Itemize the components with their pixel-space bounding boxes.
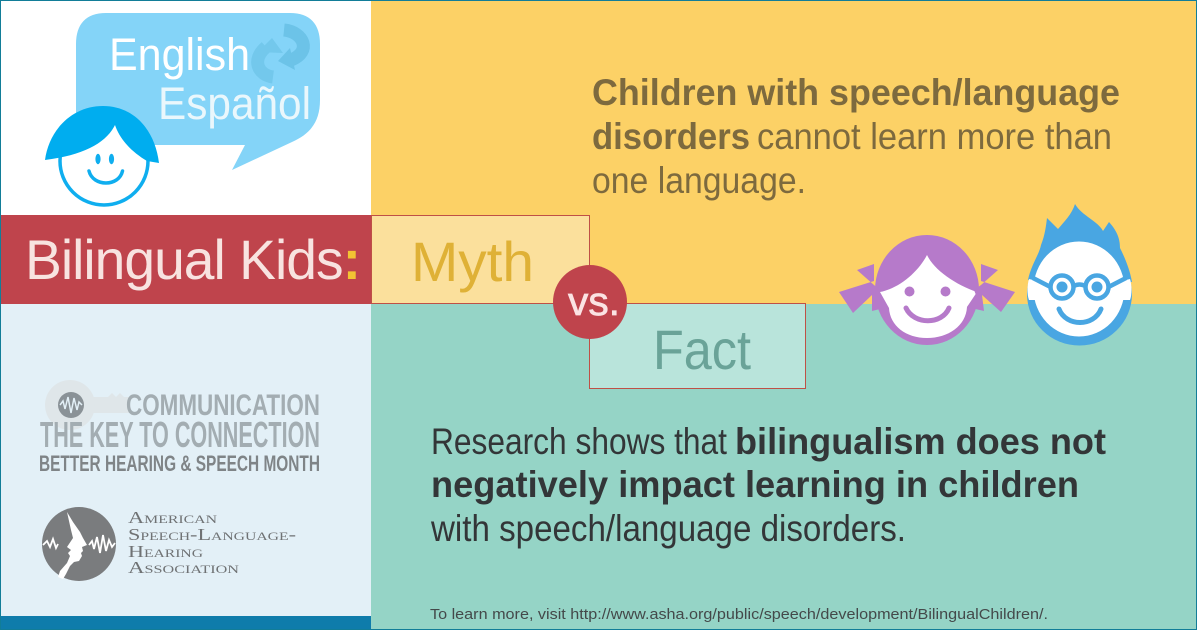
ASHA line one: American (128, 508, 217, 527)
fact label: Fact (653, 318, 751, 381)
myth statement (592, 72, 1120, 201)
lower-left arrow head (258, 38, 283, 53)
boy pupils (1056, 282, 1102, 292)
ASHA face silhouette (58, 512, 87, 579)
key sound emblem (58, 392, 84, 418)
girl head (875, 235, 979, 345)
boy hair (1028, 204, 1132, 282)
fact statement (430, 421, 1106, 549)
boy head outline (1027, 242, 1132, 346)
logo line: Better Hearing and Speech Month: BETTER HEARING & SPEECH MONTH (39, 451, 320, 476)
boy face (1034, 242, 1124, 336)
ASHA line three: Hearing (128, 542, 203, 561)
myth bold line one: Children with speech/language (592, 72, 1120, 113)
girl face (880, 255, 977, 338)
icon: boy face with glasses (1027, 204, 1132, 346)
child hair (45, 106, 159, 163)
footer band (0, 616, 371, 630)
fact bold line two: negatively impact learning in children (431, 464, 1079, 505)
child eyes (95, 154, 114, 164)
title: Bilingual Kids: Bilingual Kids: (25, 228, 360, 291)
myth label box (372, 216, 590, 304)
panel: myth yellow background (371, 0, 1197, 304)
myth regular line three: one language. (592, 160, 806, 201)
ASHA line two: Speech-Language- (128, 525, 296, 544)
icon: girl face (839, 235, 1015, 345)
vs badge (553, 265, 627, 339)
boy smile (1059, 309, 1101, 322)
girl smile (906, 308, 949, 321)
myth regular line two: cannot learn more than (757, 116, 1112, 157)
icon: English Español speech bubble with child (45, 13, 320, 205)
logo: Better Hearing and Speech Month (39, 380, 320, 476)
fact regular lead: Research shows that (431, 421, 728, 462)
logo line: The Key to Connection: THE KEY TO CONNECTION (40, 414, 320, 455)
logo line: Communication: COMMUNICATION (126, 389, 320, 422)
fact bold line one: bilingualism does not (735, 421, 1106, 462)
upper-right swap arrow (284, 30, 303, 60)
vs text: vs. (568, 280, 620, 324)
panel: fact teal background (371, 304, 1197, 630)
child smile (89, 171, 122, 183)
lower-left swap arrow (258, 47, 273, 77)
myth label: Myth (411, 230, 534, 293)
boy white cheek band (1028, 279, 1132, 300)
fact regular line three: with speech/language disorders. (430, 508, 906, 549)
boy glasses (1033, 276, 1126, 298)
key shaft (90, 393, 130, 413)
upper-right arrow head (278, 48, 295, 70)
girl left pigtail (839, 264, 888, 313)
icon: swap arrows (258, 30, 303, 77)
title band (0, 215, 372, 304)
source link text: To learn more, visit http://www.asha.org/public/speech/development/BilingualChildren/. (430, 606, 1048, 623)
ASHA emblem circle (42, 507, 116, 581)
panel: white logo area (0, 0, 371, 215)
panel: light blue sponsor area (0, 304, 371, 630)
key sound wave (60, 397, 82, 413)
fact label box (590, 304, 806, 388)
ASHA sound waves (43, 535, 115, 553)
key bow (45, 380, 95, 430)
logo: ASHA (42, 507, 296, 581)
bubble text: Español: Español (158, 78, 311, 129)
bubble text: English: English (109, 29, 250, 80)
speech bubble (76, 13, 320, 170)
myth bold word: disorders (592, 116, 750, 157)
child face (60, 117, 148, 205)
girl right pigtail (967, 264, 1015, 312)
ASHA name (128, 508, 296, 577)
key icon (45, 380, 130, 430)
ASHA line four: Association (128, 558, 239, 577)
girl eyes (904, 286, 950, 296)
